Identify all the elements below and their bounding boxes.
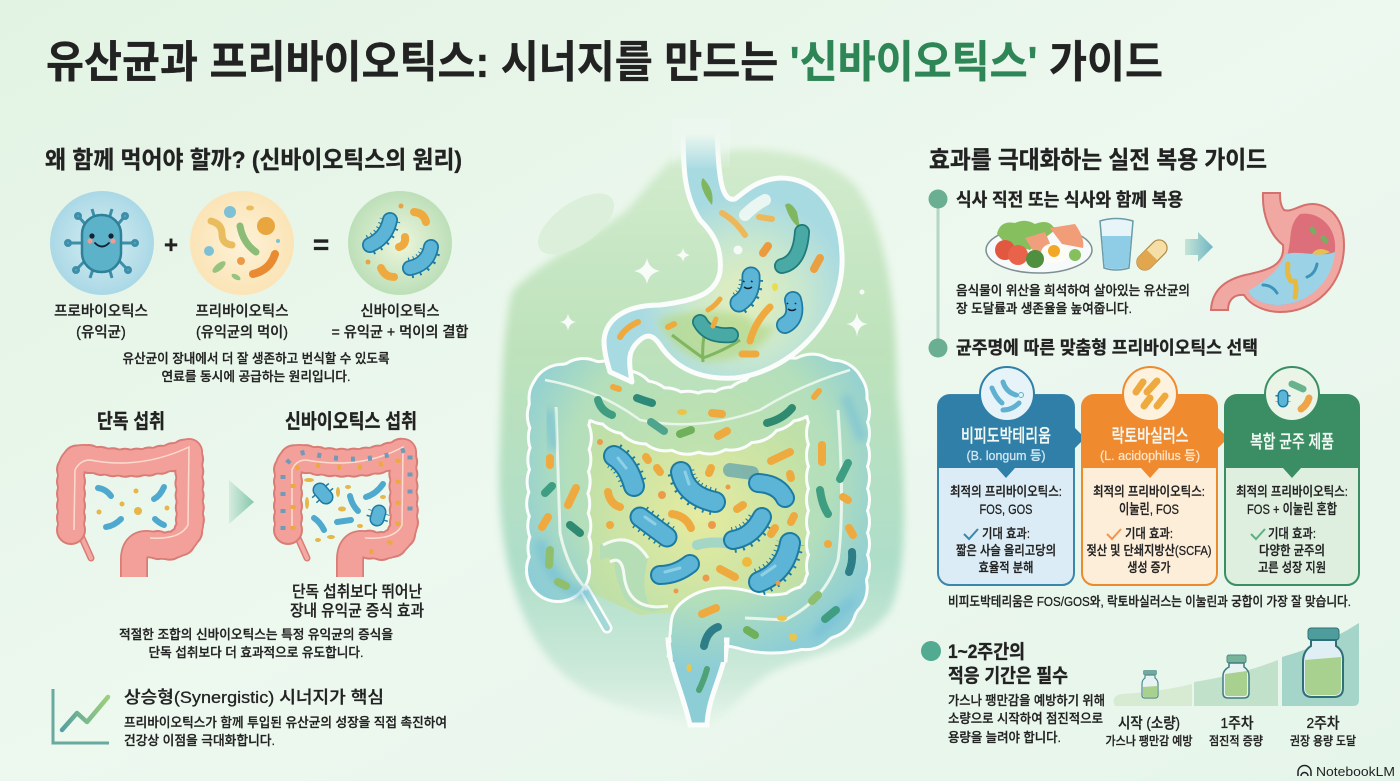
- icon: plate of food: [986, 221, 1092, 273]
- heading: with meal: 식사 직전 또는 식사와 함께 복용: [956, 190, 1183, 210]
- card body: FOS + 이눌린 혼합: [1247, 501, 1337, 517]
- labels: three concepts: (유익균의 먹이): [196, 324, 288, 341]
- labels: three concepts: 신바이오틱스: [360, 303, 440, 320]
- chart: dose ramp: [1114, 623, 1359, 706]
- heading: single intake: 단독 섭취: [97, 410, 165, 433]
- labels: dose steps: [1106, 715, 1356, 748]
- labels: three concepts: 프로바이오틱스: [54, 303, 148, 320]
- heading: adaptation period: 1~2주간의: [948, 641, 1025, 663]
- icon: colon single intake: [71, 447, 190, 577]
- heading: custom prebiotics: 균주명에 따른 맞춤형 프리바이오틱스 선택: [956, 338, 1258, 358]
- panel: synergy: [53, 688, 447, 748]
- labels: dose steps: 1주차: [1220, 715, 1254, 732]
- icon: colon synbiotic intake: [283, 447, 410, 577]
- icon: large bottle: [1303, 628, 1343, 697]
- colon contents: [542, 387, 853, 690]
- text: meal description: 장 도달률과 생존율을 높여줍니다.: [956, 301, 1132, 316]
- icon: small bottle: [1142, 670, 1158, 698]
- text: adaptation description: [948, 693, 1105, 745]
- icon: medium bottle: [1223, 655, 1249, 698]
- labels: three concepts: = 유익균 + 먹이의 결합: [332, 324, 468, 341]
- text: synergy description: 프리바이오틱스가 함께 투입된 유산균의 성장을 직접 촉진하여: [124, 715, 447, 730]
- small intestine loop: [600, 539, 670, 611]
- text: adaptation description: 가스나 팽만감을 예방하기 위해: [948, 693, 1105, 708]
- callout: superior proliferation: 장내 유익균 증식 효과: [290, 602, 424, 620]
- text: meal description: [956, 283, 1190, 316]
- card body: 효율적 분해: [978, 560, 1034, 575]
- card: bifidobacterium: (B. longum 등): [966, 448, 1046, 463]
- large intestine: [525, 370, 862, 725]
- text: meal description: 음식물이 위산을 희석하여 살아있는 유산균의: [956, 283, 1190, 298]
- text: adaptation description: 소량으로 시작하여 점진적으로: [948, 711, 1103, 726]
- card body: [950, 484, 1062, 575]
- card body: 최적의 프리바이오틱스:: [1236, 484, 1348, 499]
- icon: mixed bacteria: [1265, 367, 1319, 421]
- inner abdomen: [575, 420, 825, 615]
- card body: 고른 성장 지원: [1258, 560, 1326, 575]
- card title: 복합 균주 제품: [1250, 432, 1334, 452]
- callout: superior proliferation: [290, 583, 424, 620]
- heading: synergistic: 상승형(Synergistic) 시너지가 핵심: [124, 688, 384, 707]
- rectum: [668, 640, 727, 725]
- labels: dose steps: 권장 용량 도달: [1290, 733, 1356, 748]
- card: lactobacillus: (L. acidophilus 등): [1100, 448, 1200, 463]
- icon: stomach cross-section: [1211, 193, 1344, 312]
- arrow: comparison: [229, 480, 254, 524]
- card: bifidobacterium: [938, 367, 1085, 585]
- card title: 락토바실러스: [1112, 426, 1188, 446]
- background blob: [499, 150, 904, 727]
- heading: practical guide: 효과를 극대화하는 실전 복용 가이드: [929, 147, 1267, 174]
- sparkles: [560, 248, 868, 337]
- text: comparison description: 적절한 조합의 신바이오틱스는 특정 유익균의 증식을: [119, 627, 393, 642]
- title: 유산균과 프리바이오틱스: 시너지를 만드는 '신바이오틱스' 가이드: [46, 38, 1163, 87]
- card: lactobacillus: [1082, 367, 1228, 585]
- labels: dose steps: 시작 (소량): [1118, 715, 1180, 732]
- card body: 기대 효과:: [982, 526, 1030, 541]
- icon: probiotic circle: [50, 191, 154, 295]
- card body: FOS, GOS: [980, 501, 1032, 517]
- card body: 짧은 사슬 올리고당의: [956, 543, 1056, 558]
- section: adaptation period: [921, 623, 1359, 748]
- text: comparison description: [119, 627, 393, 660]
- equals sign: =: [313, 229, 329, 260]
- pale blob highlight: [528, 182, 624, 266]
- card title: 비피도박테리움: [961, 426, 1051, 446]
- text: synergy description: [124, 715, 447, 748]
- prebiotic particles: [597, 439, 794, 594]
- card body: 이눌린, FOS: [1119, 501, 1179, 517]
- card body: 최적의 프리바이오틱스:: [950, 484, 1062, 499]
- logo: NotebookLM: NotebookLM: [1316, 764, 1395, 779]
- labels: three concepts: (유익균): [76, 324, 126, 341]
- panel: synbiotics principle: [45, 147, 468, 384]
- card body: 젖산 및 단쇄지방산(SCFA): [1086, 543, 1212, 558]
- panel: practical guide: [921, 147, 1359, 748]
- card body: 생성 증가: [1128, 560, 1171, 575]
- card: multi strain: [1225, 367, 1359, 585]
- icon: prebiotic circle: [190, 191, 294, 295]
- esophagus fade: [672, 118, 730, 170]
- note: pairing summary: 비피도박테리움은 FOS/GOS와, 락토바실러스는 이눌린과 궁합이 가장 잘 맞습니다.: [948, 594, 1351, 609]
- labels: dose steps: 가스나 팽만감 예방: [1106, 734, 1192, 748]
- card body: 최적의 프리바이오틱스:: [1093, 484, 1205, 499]
- bullet: step three: [921, 641, 941, 661]
- text: adaptation description: 용량을 늘려야 합니다.: [948, 730, 1061, 745]
- text: principle description: 연료를 동시에 공급하는 원리입니다.: [162, 369, 350, 384]
- stomach: [604, 118, 842, 382]
- callout: superior proliferation: 단독 섭취보다 뛰어난: [292, 583, 422, 601]
- labels: three concepts: 프리바이오틱스: [196, 303, 288, 320]
- labels: dose steps: 2주차: [1306, 715, 1340, 732]
- card body: 기대 효과:: [1125, 526, 1173, 541]
- heading: synbiotic intake: 신바이오틱스 섭취: [285, 410, 417, 433]
- icon: synbiotic circle: [348, 191, 452, 295]
- icon: capsule: [1134, 237, 1170, 273]
- icon: growth chart: [53, 689, 109, 743]
- icon: glass of water: [1100, 218, 1133, 270]
- labels: three concepts: [54, 303, 468, 341]
- text: synergy description: 건강상 이점을 극대화합니다.: [124, 733, 275, 748]
- card body: [1086, 484, 1212, 575]
- plus sign: +: [164, 232, 178, 259]
- bullet: step one: [928, 190, 948, 208]
- timeline line: [936, 199, 940, 348]
- icon: blue bacteria: [980, 367, 1034, 421]
- text: comparison description: 단독 섭취보다 더 효과적으로 유도합니다.: [148, 645, 364, 660]
- bullet: step two: [928, 338, 948, 358]
- text: principle description: 유산균이 장내에서 더 잘 생존하고 번식할 수 있도록: [122, 351, 390, 366]
- text: principle description: [122, 351, 390, 384]
- heading: adaptation period: 적응 기간은 필수: [948, 665, 1068, 687]
- arrow: to stomach: [1185, 232, 1213, 262]
- illustration: digestive tract: [499, 118, 904, 727]
- panel: intake comparison: [71, 410, 424, 660]
- icon: orange bacteria: [1123, 367, 1177, 421]
- labels: dose steps: 점진적 증량: [1209, 733, 1263, 748]
- card body: 기대 효과:: [1268, 526, 1316, 541]
- card body: [1236, 484, 1348, 575]
- bacteria cluster: [614, 456, 790, 582]
- heading: adaptation period: [948, 641, 1068, 687]
- heading: why together: 왜 함께 먹어야 할까? (신바이오틱스의 원리): [45, 147, 462, 174]
- card body: 다양한 균주의: [1259, 543, 1325, 558]
